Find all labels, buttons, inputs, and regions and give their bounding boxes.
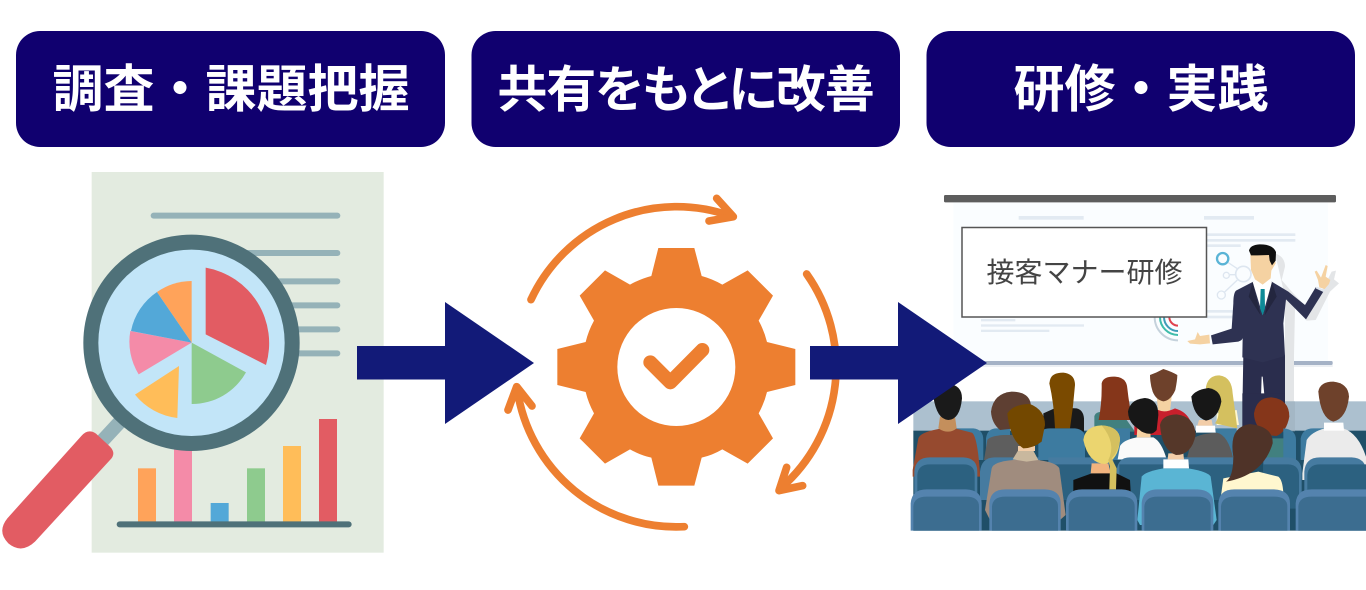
heading: training and practice [926,31,1355,147]
presenter shadow [1275,253,1339,430]
magnifier handle [2,420,122,548]
document text lines [154,216,337,353]
jacket [1211,282,1324,362]
illustration: seminar scene [911,195,1366,531]
icon: gear with check and cycle arrows [508,198,836,527]
presenter [1187,244,1339,430]
front row seats [911,489,1366,531]
wall and floor [913,401,1366,531]
presentation screen [944,195,1336,367]
heading: training and practice: 研修・実践 [1013,61,1269,118]
back row seats [943,428,1330,460]
shirt and tie [1249,279,1277,315]
head [1249,244,1276,285]
check mark [650,350,702,382]
arrow: from improvement to training [810,302,987,424]
hand left [1187,332,1210,344]
magnifier lens [91,242,292,443]
icon: document under magnifying glass [2,172,384,553]
callout: etiquette training label: 接客マナー研修 [986,257,1183,288]
legs [1242,355,1285,430]
heading: improve based on sharing: 共有をもとに改善 [497,62,874,118]
heading: improve based on sharing [472,31,900,147]
gear [557,248,795,486]
heading: survey and issue identification: 調査・課題把握 [52,61,410,118]
cycle arrow: right [779,274,836,491]
cycle arrow: bottom [508,387,684,527]
bar chart [120,419,349,524]
audience [911,369,1366,531]
pie chart [129,268,269,418]
heading: survey and issue identification [16,31,445,147]
back row far people [1043,369,1296,463]
arrow: from survey to improvement [357,302,534,424]
network diagram [1217,253,1251,299]
callout: etiquette training label [962,228,1206,317]
middle row people [913,382,1366,480]
middle row seats [914,457,1366,508]
front row people [985,404,1283,525]
document sheet [92,172,384,553]
raised hand [1315,265,1330,292]
cycle arrow: top [531,198,733,300]
